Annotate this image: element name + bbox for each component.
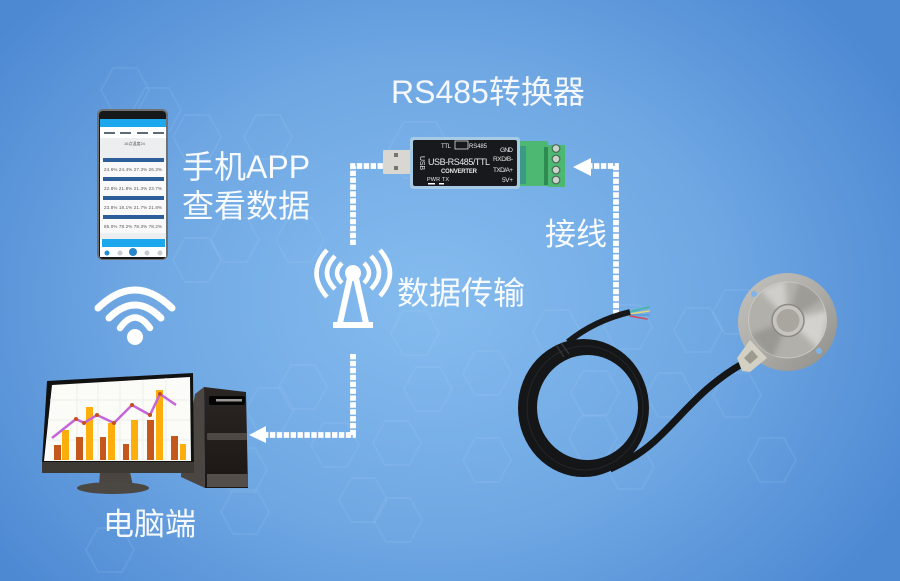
converter labels: RXD/B- [493, 156, 513, 163]
converter labels: PWR TX [427, 177, 449, 183]
converter labels: TXD/A+ [493, 167, 513, 174]
cable tail [568, 312, 630, 342]
converter labels: RS485 [469, 144, 488, 150]
label: data transmission: 数据传输 [397, 275, 525, 311]
phone readings: 22.8% 21.8% 21.3% 23.7% [104, 186, 162, 191]
sensing head [772, 304, 804, 336]
chart bars [54, 390, 186, 460]
phone readings [104, 140, 162, 229]
monitor stand [99, 472, 133, 486]
phone top tabs [104, 132, 164, 134]
green terminal block [519, 141, 565, 187]
phone caption: 手机APP [182, 149, 310, 185]
icon: antenna tower [316, 250, 390, 328]
sensor with cable [518, 273, 837, 477]
monitor frame [42, 373, 194, 473]
phone caption: 查看数据 [182, 188, 310, 224]
converter labels: 5V+ [502, 177, 513, 184]
connector: USB side dotted line [353, 166, 384, 245]
chart line [52, 392, 176, 438]
converter labels [418, 141, 513, 184]
icon: wifi [98, 290, 172, 345]
phone bars [103, 158, 164, 219]
converter labels: GND [500, 147, 513, 154]
converter body [410, 137, 520, 189]
metal flange [738, 273, 837, 371]
converter labels: USB [418, 156, 425, 170]
cable run to gland [610, 364, 742, 469]
converter labels: CONVERTER [441, 169, 478, 175]
USB plug [383, 150, 411, 174]
cable gland [737, 340, 767, 372]
cable wires [629, 307, 649, 319]
USB-RS485 converter [383, 137, 565, 189]
connector: computer dotted line with arrow [249, 354, 353, 443]
phone readings: 23.8% 18.1% 21.7% 21.8% [104, 205, 162, 210]
label: computer: 电脑端 [103, 507, 196, 542]
cable loop [518, 339, 649, 477]
monitor screen [44, 377, 191, 461]
converter labels: TTL [441, 144, 452, 150]
phone readings: 85.0% 78.2% 78.3% 78.2% [104, 224, 162, 229]
computer [42, 373, 248, 494]
decorative hexagons [86, 68, 796, 572]
converter labels: USB-RS485/TTL [428, 157, 490, 167]
label: wiring: 接线 [545, 217, 607, 252]
connector: terminal dotted line with arrow [573, 158, 616, 315]
phone readings: 24.6% 24.4% 27.3% 26.3% [104, 167, 162, 172]
title: RS485 converter: RS485转换器 [391, 74, 585, 110]
phone readings: 16点温度24 [124, 140, 146, 146]
phone [97, 109, 168, 260]
tower [181, 387, 248, 488]
